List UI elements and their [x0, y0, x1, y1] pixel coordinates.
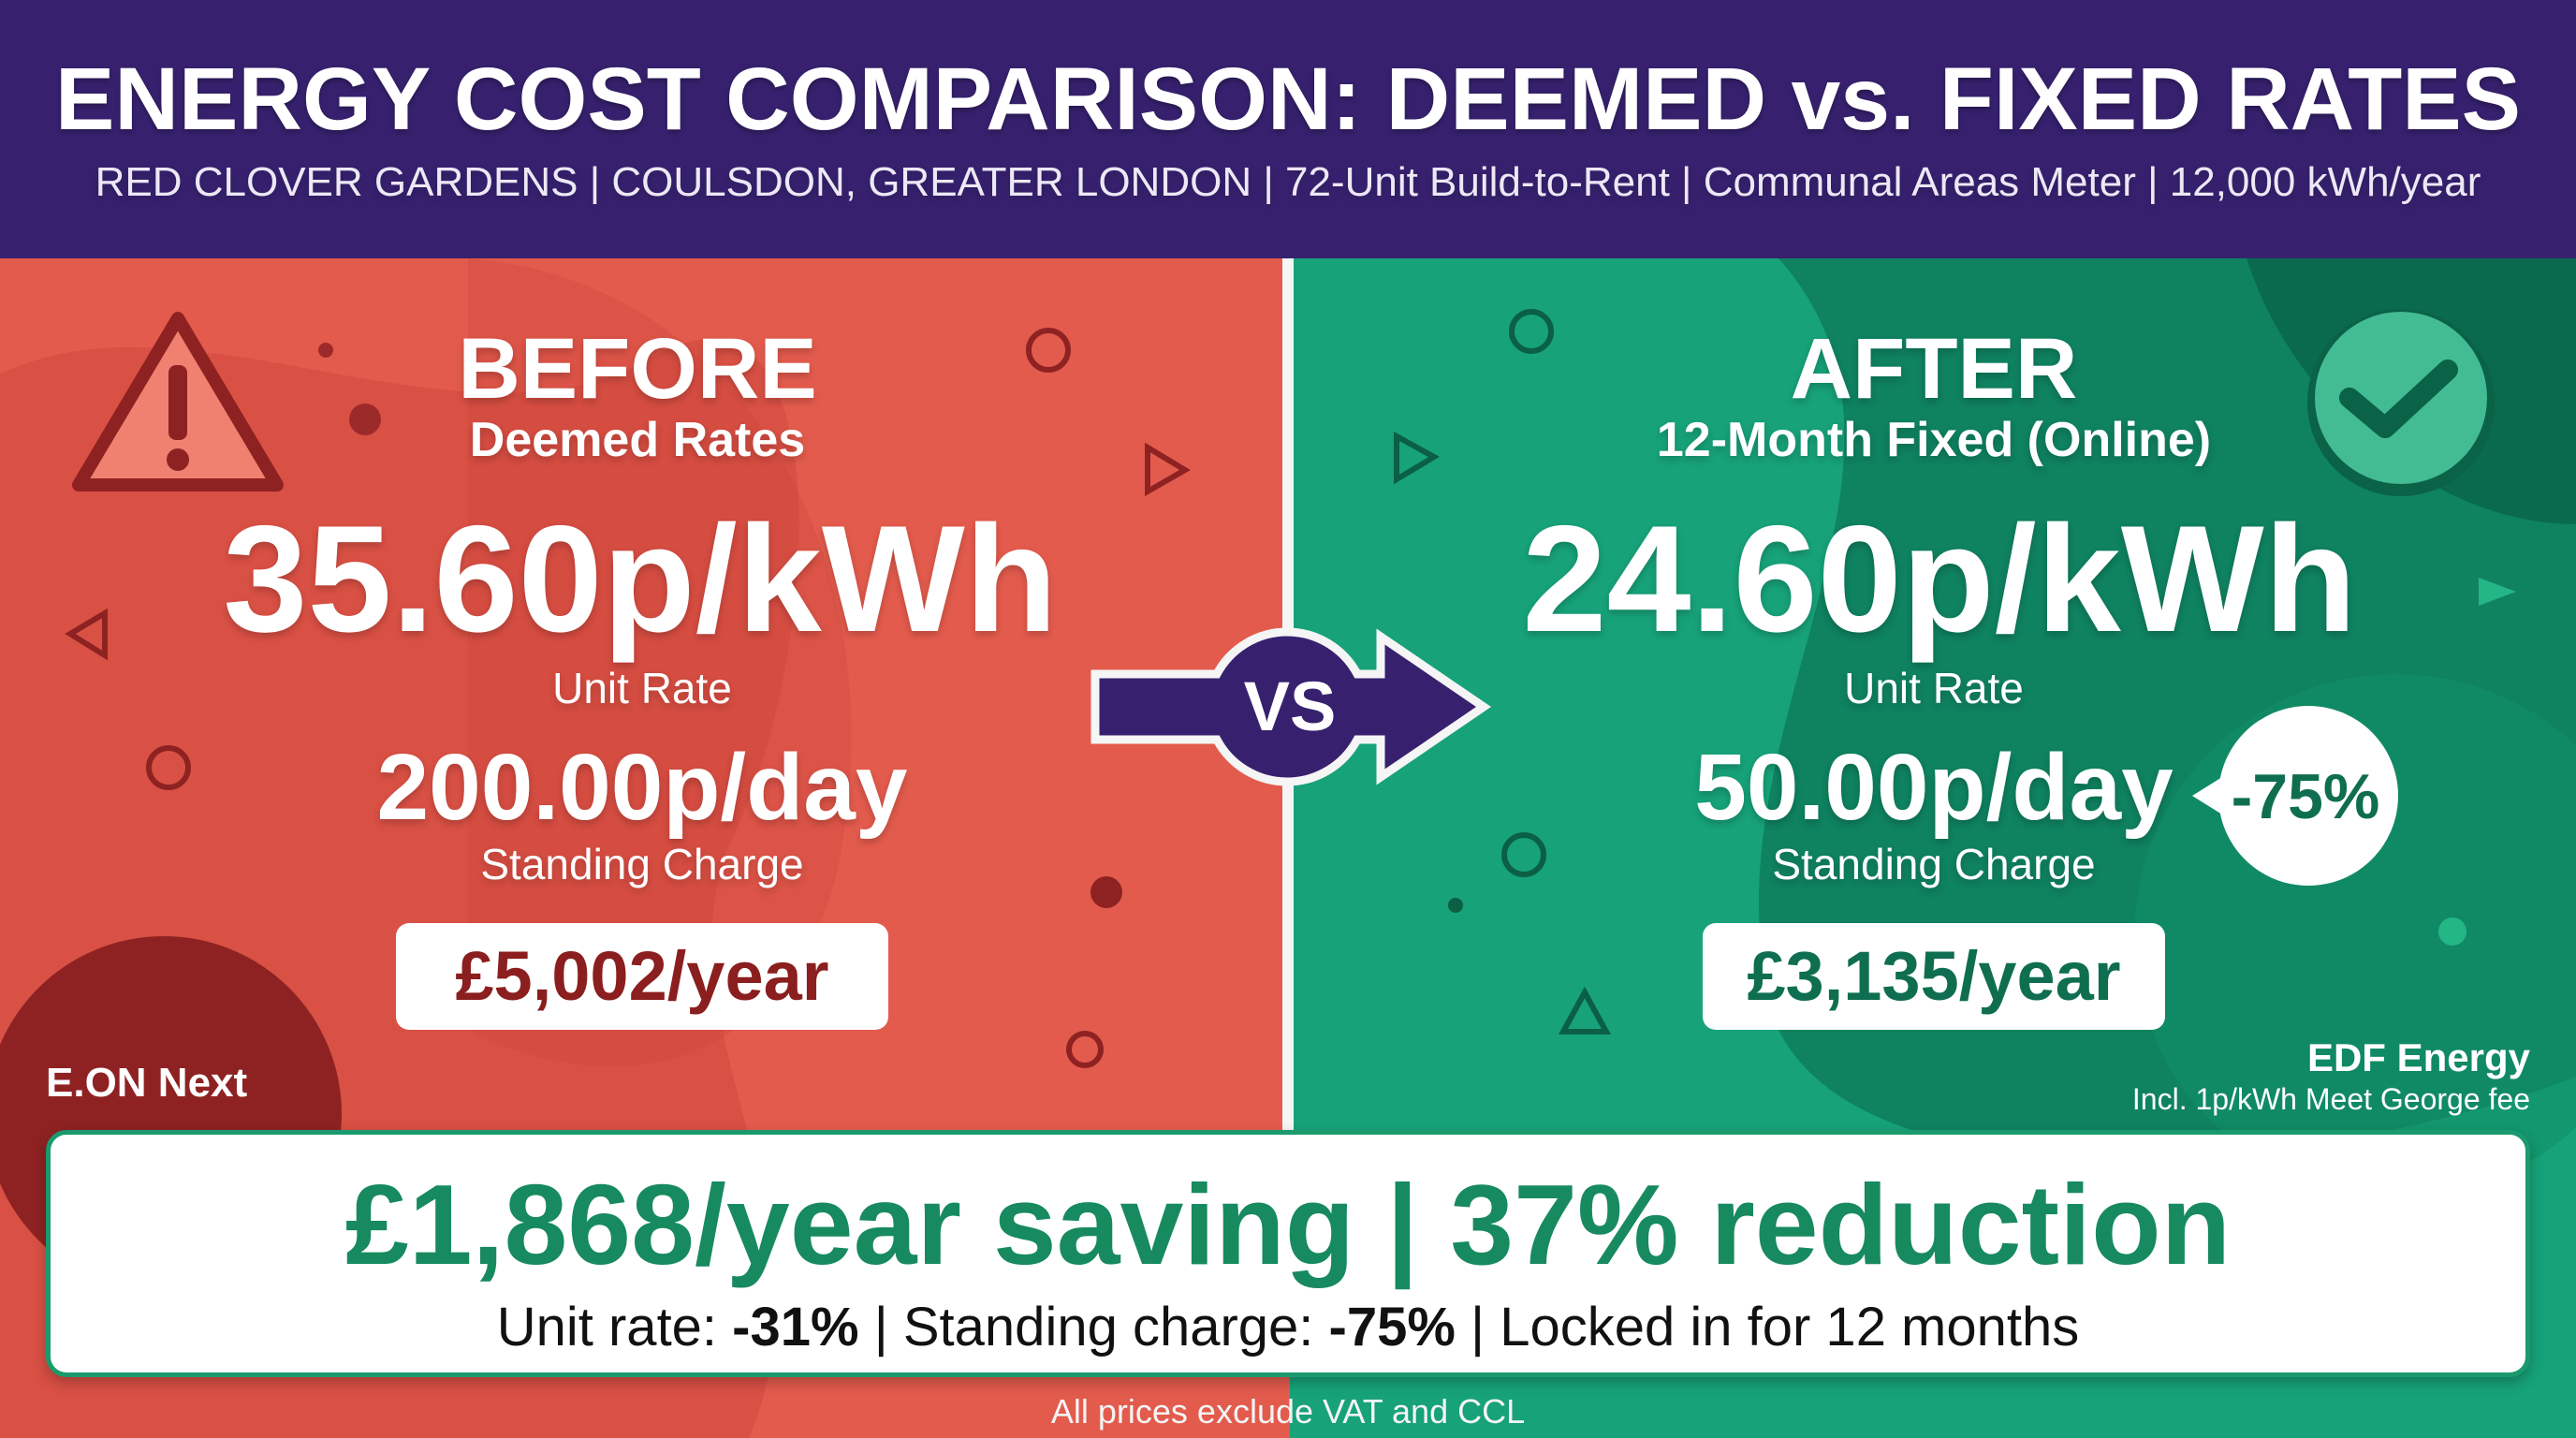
annual cost badge: [396, 923, 888, 1030]
unit rate value: 24.60p/kWh: [1522, 494, 2357, 664]
summary box: [46, 1130, 2530, 1377]
subheading: Deemed Rates: Deemed Rates: [470, 413, 805, 467]
standing charge label: Standing Charge: [480, 840, 804, 888]
standing charge value: 50.00p/day: [1694, 735, 2174, 840]
standing charge label: Standing Charge: [1772, 840, 2096, 888]
supplier: EDF Energy: [2132, 1035, 2530, 1116]
arrow: vs: [1091, 627, 1491, 786]
standing charge value: 200.00p/day: [376, 735, 908, 840]
arrow: vs: VS: [1244, 668, 1336, 745]
annual cost badge: [1703, 923, 2165, 1030]
saving headline: £1,868/year saving | 37% reduction: [345, 1161, 2231, 1288]
title: ENERGY COST COMPARISON: DEEMED vs. FIXED RATES: [55, 50, 2521, 149]
heading: BEFORE: BEFORE: [458, 321, 817, 417]
icon: warning triangle: [72, 312, 284, 492]
footer note: All prices exclude VAT and CCL: [1051, 1392, 1525, 1431]
decorations: [70, 312, 1606, 1065]
supplier: EDF Energy: EDF Energy: [2307, 1035, 2530, 1079]
unit rate value: 35.60p/kWh: [223, 494, 1058, 664]
annual cost badge: £5,002/year: [455, 937, 829, 1015]
unit rate label: Unit Rate: [552, 664, 732, 712]
annual cost badge: £3,135/year: [1747, 937, 2121, 1015]
supplier: E.ON Next: E.ON Next: [46, 1060, 247, 1106]
unit rate label: Unit Rate: [1844, 664, 2024, 712]
callout: -75% badge: -75%: [2232, 761, 2379, 832]
panel: after: [1522, 321, 2530, 1116]
subtitle: RED CLOVER GARDENS | COULSDON, GREATER LONDON | 72-Unit Build-to-Rent | Communal Areas Meter | 12,000 kWh/year: [95, 159, 2481, 205]
heading: AFTER: AFTER: [1791, 321, 2077, 417]
breakdown line: Unit rate: -31% | Standing charge: -75% | Locked in for 12 months: [497, 1297, 2079, 1357]
callout: -75% badge: [2192, 706, 2398, 886]
icon: check circle: [2307, 310, 2492, 496]
supplier: EDF Energy: Incl. 1p/kWh Meet George fee: [2132, 1082, 2530, 1116]
subheading: 12-Month Fixed: 12-Month Fixed (Online): [1657, 413, 2211, 467]
panel: before: [46, 321, 1058, 1106]
